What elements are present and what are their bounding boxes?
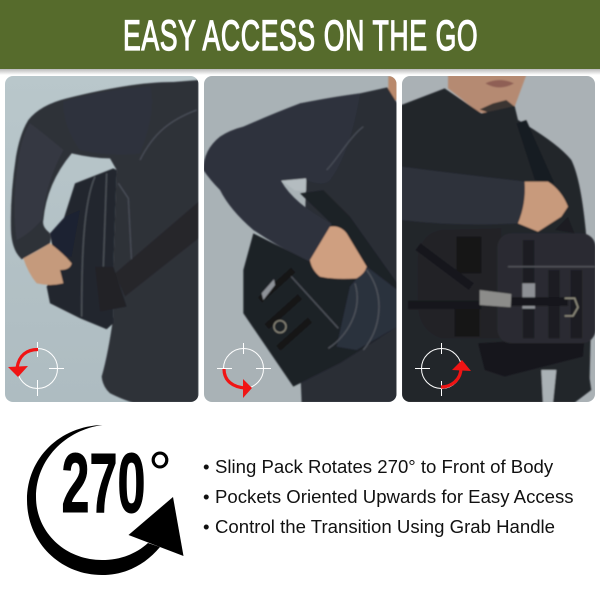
side pocket bbox=[50, 217, 65, 250]
drawstring pouch bbox=[478, 342, 584, 376]
sling strap bbox=[115, 202, 199, 297]
person shirt bbox=[401, 88, 591, 403]
shoulder strap bbox=[516, 120, 555, 183]
mouth bbox=[485, 80, 514, 87]
reticle bbox=[217, 343, 271, 388]
d-ring bbox=[565, 298, 578, 316]
velcro panels bbox=[455, 237, 481, 337]
rotation arrow, red bbox=[8, 350, 38, 377]
panel: photo 1, pack at back bbox=[5, 76, 199, 403]
rotation arrow, red bbox=[224, 369, 252, 398]
forearm bbox=[401, 167, 528, 224]
person torso bbox=[300, 87, 397, 403]
background right of body bbox=[541, 370, 556, 403]
sling pack side bbox=[47, 168, 117, 329]
strap keeper bbox=[112, 267, 126, 310]
header shadow bbox=[0, 69, 600, 75]
panel: photo 2, pack rotating bbox=[203, 76, 397, 403]
reticle bbox=[18, 342, 64, 396]
beard bbox=[480, 100, 514, 114]
d-ring bbox=[274, 321, 286, 333]
molle columns bbox=[529, 240, 576, 338]
bullet 1: Sling Pack Rotates 270° to Front of Body bbox=[215, 456, 554, 477]
forearm shading bbox=[15, 123, 63, 240]
bullet 1: • bbox=[203, 456, 210, 477]
background gap under arm bbox=[282, 178, 306, 191]
reticle bbox=[415, 343, 462, 396]
title banner bbox=[0, 0, 600, 69]
pack right panel bbox=[497, 233, 596, 343]
pack grab handle bbox=[556, 218, 574, 232]
arm bbox=[203, 93, 360, 262]
bullet 3: • bbox=[203, 516, 210, 537]
rotation arrow, red bbox=[441, 360, 471, 387]
buckle bbox=[480, 290, 511, 307]
zippers bbox=[288, 270, 379, 350]
sling pack bbox=[243, 190, 397, 387]
person shirt and arm bbox=[11, 80, 199, 403]
shirt seam bbox=[327, 127, 363, 170]
face and neck bbox=[448, 75, 526, 117]
degree mark: ° bbox=[148, 440, 172, 507]
sternum strap bbox=[408, 247, 568, 305]
molle webbing bbox=[260, 270, 310, 348]
shirt seams bbox=[118, 110, 197, 263]
bullet 2: • bbox=[203, 486, 210, 507]
270 label: 270 bbox=[62, 436, 146, 530]
neck bbox=[388, 76, 397, 100]
hand bbox=[23, 243, 72, 285]
benefit list bbox=[203, 456, 574, 537]
pack left panel bbox=[418, 228, 501, 338]
pocket zipper bbox=[508, 265, 595, 269]
label bbox=[262, 279, 275, 300]
label bbox=[522, 283, 535, 309]
panel: photo 3, pack at front bbox=[401, 75, 596, 403]
hand bbox=[310, 226, 367, 279]
pack zippers bbox=[82, 173, 107, 317]
shoulder shading bbox=[63, 87, 152, 154]
arrow head bbox=[128, 497, 184, 556]
pack back panel bbox=[337, 267, 397, 350]
title: EASY ACCESS ON THE GO bbox=[123, 12, 478, 60]
hand bbox=[518, 182, 568, 232]
bullet 3: Control the Transition Using Grab Handle bbox=[215, 516, 555, 537]
270 degree icon bbox=[27, 425, 184, 575]
bullet 2: Pockets Oriented Upwards for Easy Access bbox=[215, 486, 574, 507]
circular arrow bbox=[27, 425, 160, 575]
